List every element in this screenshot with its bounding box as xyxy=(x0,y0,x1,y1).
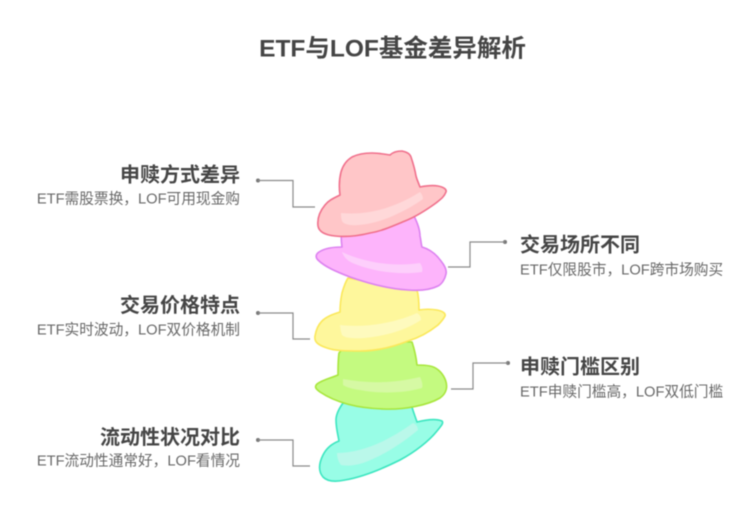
label: 交易价格特点: ETF实时波动，LOF双价格机制 xyxy=(37,322,240,338)
hat: yellow xyxy=(315,278,445,351)
hat highlight xyxy=(342,252,422,273)
label: 申赎方式差异: 申赎方式差异 xyxy=(120,162,240,186)
label: 申赎方式差异 xyxy=(37,162,240,208)
hat highlight xyxy=(341,192,423,225)
label: 申赎门槛区别: ETF申赎门槛高，LOF双低门槛 xyxy=(520,384,723,400)
hat highlight xyxy=(337,423,418,466)
label: 交易场所不同: ETF仅限股市，LOF跨市场购买 xyxy=(520,262,723,278)
label: 交易价格特点 xyxy=(37,293,240,338)
title: ETF与LOF基金差异解析 xyxy=(259,34,526,62)
connector: 申赎方式差异 xyxy=(256,178,315,207)
label: 流动性状况对比: 流动性状况对比 xyxy=(100,426,240,449)
hat: teal xyxy=(320,403,443,481)
label: 交易场所不同: 交易场所不同 xyxy=(520,232,640,256)
hat: pink xyxy=(316,216,446,290)
hat highlight xyxy=(343,377,422,392)
label: 交易场所不同 xyxy=(520,232,723,278)
label: 流动性状况对比 xyxy=(37,426,240,470)
label: 流动性状况对比: ETF流动性通常好，LOF看情况 xyxy=(37,452,240,470)
label: 申赎门槛区别: 申赎门槛区别 xyxy=(520,356,640,378)
connector: 交易场所不同 xyxy=(448,240,507,267)
connector: 流动性状况对比 xyxy=(256,438,310,466)
hat: lime xyxy=(316,340,447,409)
hat: red xyxy=(318,151,446,236)
label: 申赎方式差异: ETF需股票换，LOF可用现金购 xyxy=(37,190,240,208)
label: 申赎门槛区别 xyxy=(520,356,723,400)
connector: 交易价格特点 xyxy=(256,311,310,339)
label: 交易价格特点: 交易价格特点 xyxy=(120,293,240,317)
hat highlight xyxy=(340,313,421,338)
connector: 申赎门槛区别 xyxy=(451,361,510,389)
